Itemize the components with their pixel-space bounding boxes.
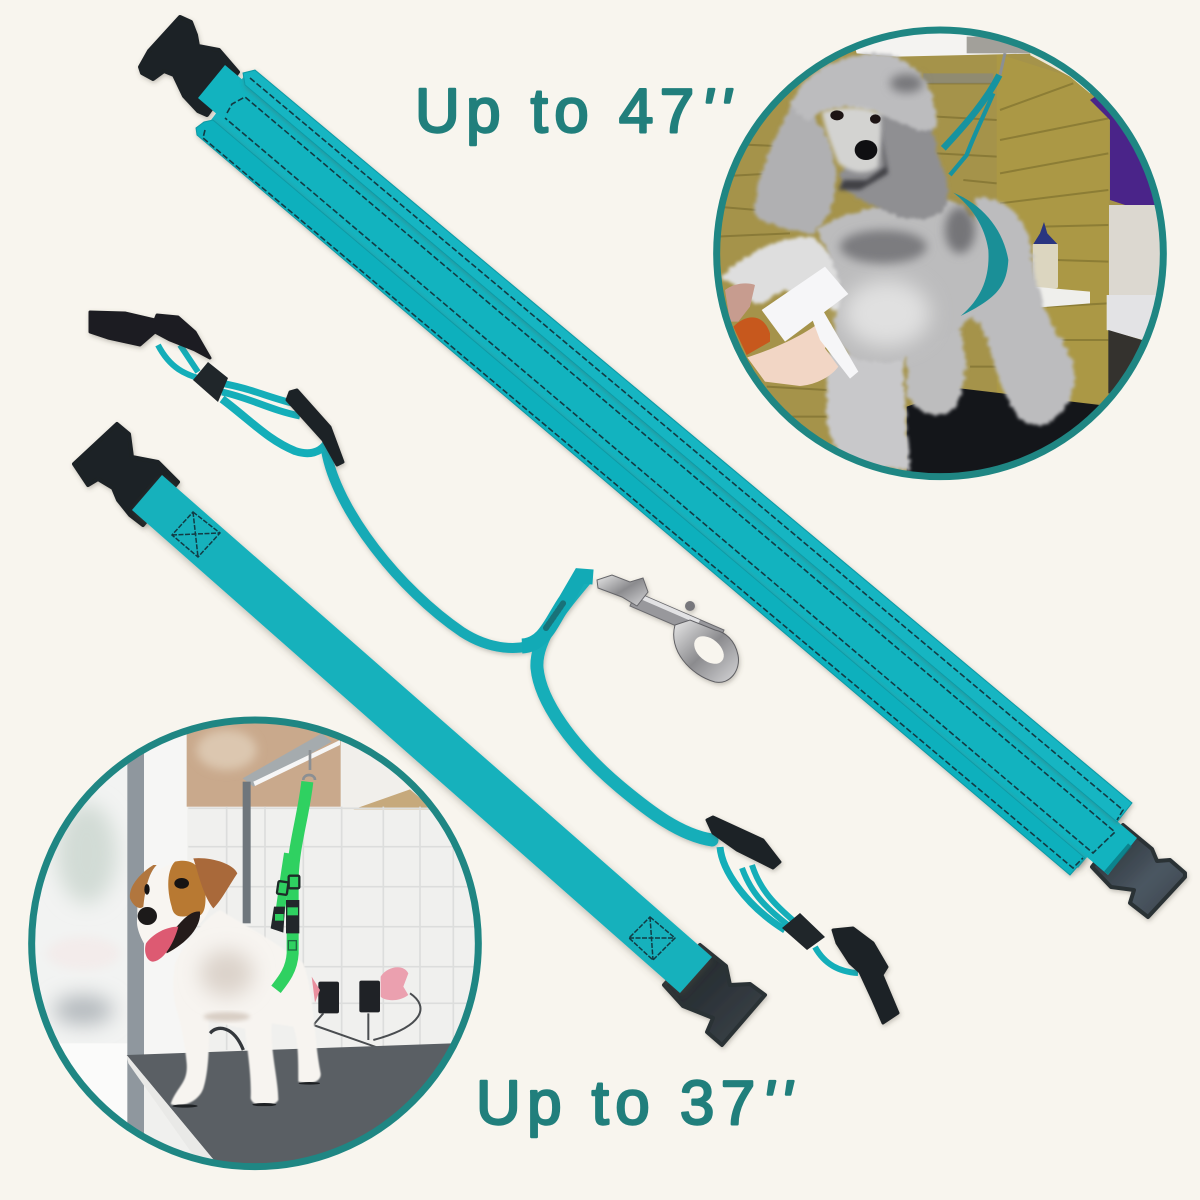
buckle: long strap top	[140, 17, 238, 115]
hook opening	[689, 631, 729, 669]
leash junction	[522, 576, 593, 646]
leash branch to lower clip	[537, 580, 712, 840]
table edge	[127, 1055, 217, 1163]
ceiling and bracket	[856, 34, 1090, 94]
brown face patch	[168, 861, 206, 917]
back shadow	[945, 207, 975, 253]
poodle nose	[855, 140, 877, 160]
terrier	[130, 858, 321, 1108]
hand holding brush	[747, 318, 838, 386]
poodle	[722, 53, 1075, 470]
left ear	[755, 100, 836, 233]
photo: poodle on grooming table	[710, 20, 1180, 490]
topknot dark patch	[890, 74, 923, 93]
open mouth	[163, 912, 200, 953]
hook thumb pin	[685, 601, 695, 611]
upper clip assembly	[90, 312, 343, 465]
Y leash	[326, 450, 712, 840]
white fabric	[1109, 205, 1160, 295]
stitched box top	[172, 512, 220, 557]
head topknot	[792, 53, 937, 131]
dog head	[137, 860, 213, 958]
grooming table	[127, 1043, 490, 1180]
label: up to 47: Up to 47''	[415, 77, 737, 146]
buckle: long strap bottom	[1092, 825, 1185, 917]
upper flap of long strap	[243, 70, 1132, 822]
terrier eyes	[144, 878, 189, 895]
dark corner	[1108, 330, 1142, 394]
orange toy	[733, 317, 770, 355]
lower loops	[720, 847, 858, 973]
terrier photo ring	[32, 720, 478, 1167]
swivel barrel	[597, 575, 648, 606]
brick wall	[720, 50, 1142, 471]
hook rod	[630, 592, 724, 644]
teal hanging leash	[943, 53, 1005, 175]
face	[822, 107, 881, 172]
buckle: medium strap top	[74, 424, 178, 525]
junction stitching	[546, 602, 564, 628]
left brown ear	[130, 865, 157, 908]
wall patch	[197, 730, 257, 770]
upper keeper	[193, 362, 228, 402]
front leg	[827, 353, 910, 470]
upper loops	[158, 345, 326, 453]
strap underlay	[205, 75, 1125, 868]
tiled wall	[20, 710, 490, 1180]
green hanging leash	[271, 750, 315, 989]
dog body and legs	[171, 910, 321, 1106]
lower keeper	[782, 913, 825, 950]
lower slider	[707, 817, 780, 868]
lower clip assembly	[707, 817, 898, 1023]
paw shadows	[172, 1082, 320, 1108]
belly shading	[203, 1012, 250, 1021]
power adapters and hose	[312, 967, 437, 1068]
mouth shadow	[836, 138, 890, 193]
leash branch to upper clip	[326, 450, 538, 648]
tongue end shadow	[1106, 845, 1130, 873]
chest shadow	[840, 230, 927, 263]
lower plug	[833, 928, 898, 1023]
neck fur	[840, 111, 948, 219]
teal body strap	[953, 193, 1008, 316]
chest	[817, 200, 988, 362]
upper plug	[90, 312, 210, 358]
blurred window	[48, 801, 127, 1122]
body shading	[200, 950, 253, 997]
centre tongue of long strap	[198, 65, 1137, 875]
purple shirt	[1090, 97, 1154, 205]
tan ledge	[353, 789, 433, 809]
upper slider	[287, 390, 343, 465]
middle leg	[907, 325, 965, 415]
hook rod highlight	[638, 594, 700, 624]
table legs behind dog	[210, 1028, 243, 1050]
white slicker brush	[762, 267, 858, 379]
side table	[1106, 295, 1156, 340]
buckle: medium strap bottom	[664, 945, 765, 1045]
tongue	[145, 927, 178, 962]
black table	[907, 388, 1100, 480]
raised arm	[722, 237, 853, 313]
stitched box bottom	[629, 917, 675, 960]
window post	[127, 753, 144, 1140]
poodle eyes	[830, 110, 881, 124]
label: up to 37: Up to 37''	[476, 1069, 798, 1138]
bottle	[1033, 222, 1058, 288]
stitching on long strap	[203, 78, 1123, 868]
photo: terrier on grooming table	[20, 710, 490, 1180]
terrier nose	[138, 907, 157, 925]
medium 37 inch strap	[132, 475, 712, 993]
hand holding paw	[725, 283, 755, 322]
lower flap of long strap	[196, 120, 1085, 875]
grooming arm	[243, 733, 340, 923]
upper right wall	[342, 740, 433, 810]
shelf	[1033, 287, 1090, 307]
long 47 inch strap	[196, 65, 1137, 875]
hook body	[674, 620, 738, 682]
white pillar	[144, 730, 187, 1055]
poodle photo ring	[717, 30, 1163, 477]
medium strap body	[132, 475, 712, 993]
right brown ear	[193, 858, 237, 908]
tile grid	[188, 807, 477, 1050]
chest highlight	[843, 280, 930, 347]
snap hook	[597, 575, 738, 682]
rough wall	[187, 720, 341, 807]
hind body	[963, 197, 1075, 425]
